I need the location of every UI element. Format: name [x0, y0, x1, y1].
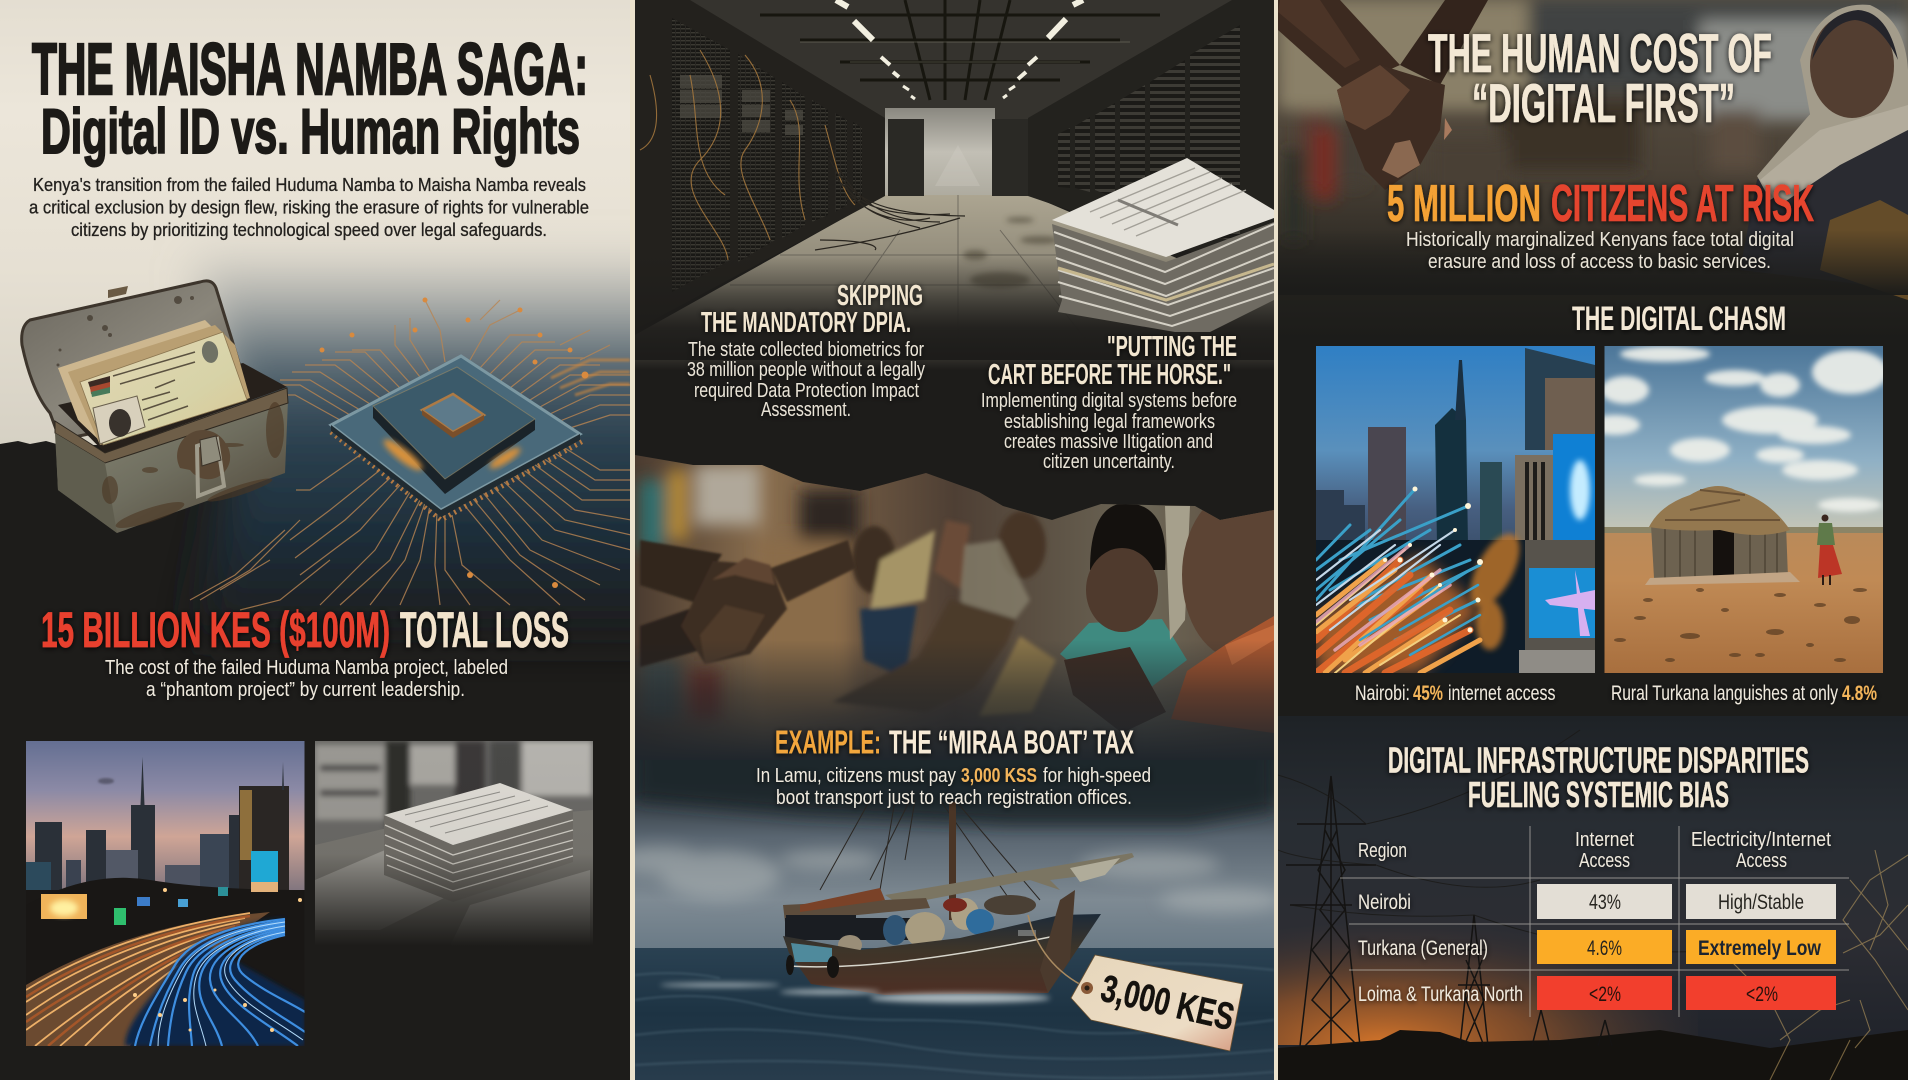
title: THE MAISHA NAMBA SAGA:	[32, 30, 588, 110]
table row: Loima and Turkana North: <2%	[1746, 983, 1778, 1006]
text block: cart before the horse: establishing legal frameworks	[1004, 411, 1215, 433]
intro text: citizens by prioritizing technological speed over legal safeguards.	[71, 219, 547, 240]
title	[32, 30, 588, 167]
text block: skipping the DPIA: The state collected biometrics for	[688, 339, 924, 361]
text block: skipping the DPIA: required Data Protection Impact	[694, 380, 919, 402]
caption: Nairobi: 45%	[1413, 682, 1443, 705]
table header	[1358, 831, 1831, 868]
text block: skipping the DPIA: THE MANDATORY DPIA.	[701, 307, 911, 339]
stat description: a “phantom project” by current leadership.	[146, 679, 465, 701]
table row: Turkana: 4.6%	[1587, 937, 1622, 960]
table row: Turkana: Turkana (General)	[1358, 937, 1488, 960]
panel: process failures and costs	[615, 0, 1298, 1080]
intro text	[29, 174, 589, 240]
text block: cart before the horse: CART BEFORE THE HORSE."	[988, 359, 1231, 391]
circuit board background	[186, 248, 630, 618]
table header: Region	[1358, 840, 1407, 862]
table row: Neirobi: High/Stable	[1718, 891, 1804, 914]
photo: stack of paper records	[315, 741, 593, 946]
price tag: 3,000 KES: 3,000 KES	[1097, 968, 1238, 1039]
stat description: Historically marginalized Kenyans face total digital	[1406, 229, 1794, 251]
table row: Loima and Turkana North: <2%	[1589, 983, 1621, 1006]
stat: citizens at risk	[1386, 181, 1814, 225]
caption: Nairobi: internet access	[1448, 682, 1556, 705]
icon: microchip	[331, 356, 585, 520]
text block: cart before the horse	[981, 331, 1237, 473]
stat description	[105, 657, 508, 701]
background: power lines at sunset with map	[1278, 716, 1908, 1080]
caption: Nairobi	[1356, 684, 1555, 700]
photo: overloaded boat	[660, 800, 1134, 1003]
text block: skipping the DPIA: SKIPPING	[837, 280, 923, 312]
text block: Miraa boat tax: THE “MIRAA BOAT’ TAX	[889, 724, 1134, 760]
stat: total loss: 15 BILLION KES ($100M)	[41, 602, 390, 658]
caption: Turkana: Rural Turkana languishes at only	[1611, 682, 1838, 705]
table row: Turkana: Extremely Low	[1698, 937, 1822, 960]
stat description: The cost of the failed Huduma Namba project, labeled	[105, 657, 508, 679]
panel: Maisha Namba saga	[0, 0, 630, 1080]
table header: Access	[1736, 850, 1787, 872]
photo: Nairobi highway at dusk	[26, 741, 305, 1046]
table row: Turkana	[1358, 930, 1836, 964]
photo: holding hands and faceless woman	[1278, 0, 1908, 300]
stat: citizens at risk: 5 MILLION	[1387, 175, 1541, 233]
text block: skipping the DPIA: 38 million people without a legally	[687, 359, 925, 381]
icon: stack of paper forms	[1052, 158, 1274, 332]
text block: cart before the horse: "PUTTING THE	[1107, 331, 1237, 363]
stat description	[1406, 231, 1794, 268]
table row: Neirobi	[1358, 884, 1836, 919]
text block: Miraa boat tax: EXAMPLE:	[775, 724, 881, 760]
photo: storm sky and sea	[635, 760, 1274, 1080]
table row: Loima and Turkana North: Loima & Turkana North	[1358, 983, 1523, 1006]
text block: skipping the DPIA: Assessment.	[761, 399, 851, 421]
table row: Loima and Turkana North	[1358, 976, 1836, 1010]
icon: rusty tin box with ID cards	[22, 281, 288, 533]
table row: Neirobi: Neirobi	[1358, 891, 1411, 914]
heading: human cost	[1426, 30, 1774, 127]
intro text: Kenya's transition from the failed Huduma Namba to Maisha Namba reveals	[33, 174, 586, 195]
table row: Neirobi: 43%	[1589, 891, 1621, 914]
table header: Internet	[1575, 829, 1634, 851]
text block: Miraa boat tax: 3,000 KSS	[961, 765, 1037, 787]
table header: Electricity/Internet	[1691, 829, 1831, 851]
price tag: 3,000 KES	[1071, 955, 1243, 1051]
text block: Miraa boat tax	[756, 724, 1151, 809]
table header: Access	[1579, 850, 1630, 872]
text block: cart before the horse: Implementing digital systems before	[981, 390, 1237, 412]
title: Digital ID vs. Human Rights	[41, 97, 580, 167]
heading: infrastructure disparities: FUELING SYSTEMIC BIAS	[1468, 774, 1729, 815]
caption: Turkana: 4.8%	[1842, 682, 1877, 705]
text block: cart before the horse: creates massive IItigation and	[1004, 431, 1213, 453]
stat: total loss: TOTAL LOSS	[400, 602, 569, 658]
heading: digital chasm: THE DIGITAL CHASM	[1572, 300, 1786, 338]
photo: rural Turkana hut	[1590, 346, 1888, 673]
panel divider left	[630, 0, 635, 1080]
photo: Nairobi fibre optics	[1316, 346, 1596, 673]
caption: Nairobi: Nairobi:	[1355, 682, 1410, 705]
heading: infrastructure disparities	[1387, 746, 1810, 810]
photo: neglected server room	[635, 0, 1274, 370]
heading: human cost: “DIGITAL FIRST”	[1472, 72, 1735, 134]
panel divider right	[1274, 0, 1278, 1080]
intro text: a critical exclusion by design flew, risking the erasure of rights for vulnerable	[29, 196, 589, 218]
table: digital infrastructure disparities	[1340, 826, 1849, 1017]
text block: Miraa boat tax: for high-speed	[1043, 765, 1151, 787]
text block: cart before the horse: citizen uncertainty.	[1043, 451, 1175, 473]
photo: community hands and faces	[635, 450, 1298, 760]
panel: the human cost	[1278, 0, 1908, 1080]
text block: Miraa boat tax: boot transport just to reach registration offices.	[776, 787, 1132, 809]
stat description: erasure and loss of access to basic services.	[1428, 251, 1771, 273]
text block: Miraa boat tax: In Lamu, citizens must pay	[756, 765, 956, 787]
text block: skipping the DPIA	[687, 280, 925, 421]
